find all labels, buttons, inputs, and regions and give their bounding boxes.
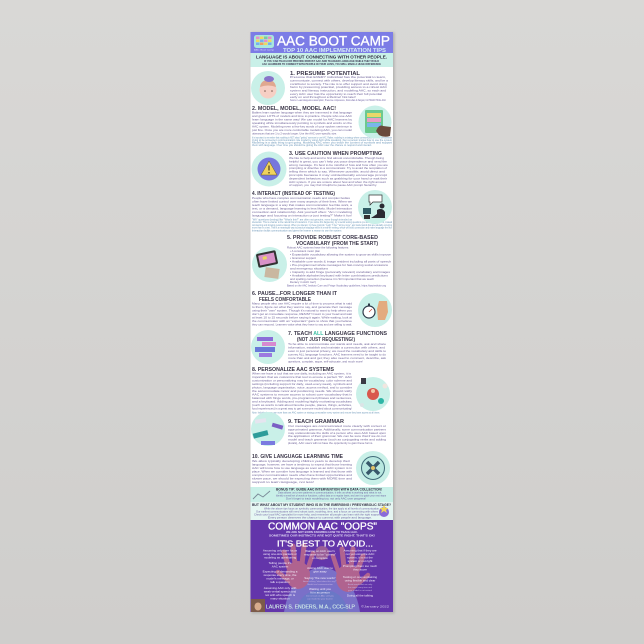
text block: and a keyboard. Adding and modeling highly motivating vocabulary bbox=[252, 400, 352, 404]
notes: more than in a test. This is a meaningful way to practice language skills in a real-life setting, which will build connection and make language feel fun bbox=[252, 227, 393, 230]
text block: Don't forget to track modeling too, not only AAC user progress! bbox=[286, 498, 366, 500]
icon: personalization hub bbox=[356, 377, 390, 411]
panel: tip 2 model bbox=[251, 106, 393, 147]
text block: (such as words to talk about favorite people, places, things, activities, bbox=[252, 403, 352, 407]
text block: AAC systems to ensure access to robust core vocabulary that is bbox=[252, 392, 353, 396]
column: right oops: Avoid words that are only bbox=[348, 583, 373, 586]
text block: Many people who use AAC require a lot of time to process what is said bbox=[252, 302, 352, 306]
text block bbox=[269, 530, 375, 538]
heading: 5. PROVIDE ROBUST CORE-BASED bbox=[287, 235, 378, 241]
text block bbox=[287, 246, 391, 288]
notes: Interaction builds communication and gives the learner a reason to use the system. bbox=[252, 229, 342, 232]
panel: tip 9 grammar bbox=[251, 412, 386, 446]
text block: the communicator with an "expectant" gaze to show that you believe bbox=[252, 319, 352, 323]
subtitle: TOP 10 AAC IMPLEMENTATION TIPS bbox=[283, 48, 386, 54]
intro band: IF YOU CAN TEACH OR PROVIDE ROBUST AAC AND TEACHER LANGUAGE WHILE THEY BUILD bbox=[264, 60, 379, 63]
text block: telling them which to say. Whenever possible, avoid direct and bbox=[289, 170, 385, 174]
text block: Check your local AAC specialist for more help, and remember all people can learn with the right support bbox=[254, 514, 380, 516]
text block: learn language in the same way! We can model for AAC learners by bbox=[252, 118, 352, 122]
title: AAC BOOT CAMP bbox=[277, 34, 390, 48]
text block: photos, language organization, voice, access method, and to consider bbox=[252, 386, 352, 390]
column: left oops bbox=[263, 548, 298, 600]
text block: even in just personal privacy, we need the vocabulary and skills to bbox=[288, 349, 386, 353]
text block: WE ARE NOT BORN KNOWING HOW TO TEACH AAC. bbox=[286, 530, 358, 534]
notes: trying to be someone's communication role model by using AAC while speaking, then a person knows how to use the system bbox=[252, 139, 392, 142]
column: right oops: Prompting them too much bbox=[343, 564, 378, 568]
column: left oops: Assuming AAC only with bbox=[264, 586, 297, 590]
text block: teach language in a way that makes communication feel like work, a bbox=[252, 203, 352, 207]
text block: the application of their grammar. We can be sure that if we do not bbox=[288, 434, 386, 438]
icon: logo: AAC Boot Camp bbox=[254, 48, 275, 52]
notes: commenting and showing genuine interest. When you interact, try these prompts: "Look" "I like" "tell me more", and model words that are naturally occurring bbox=[252, 224, 393, 227]
text block: information, establish and maintain a connection with others, and bbox=[288, 346, 385, 350]
column: right oops: using flexible and clear bbox=[345, 578, 375, 582]
text block bbox=[252, 459, 352, 484]
text block: AAC system. If you are unsure about how and when the right amount bbox=[289, 180, 386, 184]
column: left oops: response every time, the bbox=[264, 573, 297, 577]
text block: language and focusing on interaction or just testing?" Make it fun! bbox=[252, 213, 352, 217]
heading: 10. GIVE LANGUAGE LEARNING TIME bbox=[252, 454, 344, 460]
column: right oops: Assuming that if they are bbox=[343, 548, 377, 552]
text block: often have limited control over many aspects of their lives. When we bbox=[252, 199, 352, 203]
column: middle oops: Saying "the new words" bbox=[304, 576, 336, 580]
column: right oops: the same every time and bbox=[348, 586, 373, 589]
icon: warning triangle bbox=[252, 152, 286, 186]
text block: of support, you may find it helpful to pause AAC prompt hierarchy. bbox=[289, 183, 377, 187]
text block: and spelling correction (because it is SO important that we teach bbox=[290, 277, 374, 281]
text block: and emergency situations bbox=[290, 266, 328, 270]
text block: Source: Least dangerous assumption; Presume competence, Donnellan & Zangari, for PRAACTICAL AAC bbox=[290, 99, 386, 102]
column: middle oops: give away bbox=[313, 570, 327, 574]
text block: Robust AAC systems have the following features: bbox=[287, 246, 349, 250]
text block: model and teach grammar (such as conjugating verbs and adding bbox=[288, 438, 386, 442]
heading: BONUS TIP: GUIDE AAC INTERVENTION WITH DATA COLLECTION! bbox=[276, 488, 382, 492]
text block: early on and throughout a lifetime! Not later! bbox=[290, 95, 356, 99]
text block: settings (including support for daily, used-every-week), symbols and bbox=[252, 382, 352, 386]
text block: Data allows us to see patterns in communication, it tells us what is working and what is not. bbox=[278, 492, 382, 494]
text block: To be able to communicate our wants and needs, ask and share bbox=[288, 342, 386, 346]
text block: system and literacy instruction, and modeling AAC, so each and bbox=[290, 89, 386, 93]
text block: When we have a tool that we use daily, including an AAC system, it is bbox=[252, 372, 351, 376]
heading bbox=[288, 331, 388, 343]
column: left oops: Expecting or demanding a bbox=[263, 570, 298, 574]
text block: to them, figure out what they want to say, and generate their message bbox=[252, 305, 352, 309]
panel: tip 3 caution bbox=[252, 151, 388, 187]
text block: place. When we consider how language is learned and that those with bbox=[252, 470, 352, 474]
text block: complex communication needs often have limited opportunities and bbox=[252, 473, 352, 477]
icon: line graph bbox=[253, 491, 270, 499]
text block: We like to help and tend to find almost uncomfortable. Though being bbox=[289, 156, 384, 160]
text block: convey ALL language functions. AAC learners need to be taught to do bbox=[288, 352, 386, 356]
text block bbox=[251, 110, 353, 136]
column: right oops: they score bbox=[353, 568, 367, 572]
text block: communicate, connect with others, develop literacy skills, and be a bbox=[290, 78, 388, 82]
column: left oops: AAC system bbox=[272, 564, 289, 568]
text block: AAC system. Modeling even a few key words of your spoken sentence is bbox=[252, 124, 352, 128]
text block: helpful is great, you can't help you pace dependence and send the bbox=[289, 159, 387, 163]
column: left oops: Assuming only core focus bbox=[263, 548, 298, 552]
icon: logo bbox=[254, 35, 275, 52]
column: middle oops: response to be "correct" bbox=[304, 552, 336, 556]
text block: Our earliest communicators still need robust tools, modeling, time, and a focus on connecting with others bbox=[256, 510, 379, 514]
column: middle oops: Asking AAC user to bbox=[307, 566, 333, 570]
column: middle oops bbox=[303, 549, 337, 600]
text block: dependent behaviors such as grabbing for your hand or wait their bbox=[289, 176, 387, 180]
heading: 6. PAUSE...FOR LONGER THAN IT bbox=[252, 291, 338, 297]
text block: • Capacity to add fringe (personally relevant) vocabulary and images bbox=[290, 270, 390, 274]
heading: 2. MODEL, MODEL, MODEL AAC! bbox=[252, 106, 336, 112]
text block bbox=[252, 372, 353, 410]
text block: plurals), AAC users will not have the opportunity to gain these forms. bbox=[288, 441, 373, 445]
icon: author portrait bbox=[251, 599, 265, 612]
text block: language, however, we have a tendency to expect that those learning bbox=[252, 462, 352, 466]
text block bbox=[290, 75, 388, 102]
notes bbox=[252, 218, 393, 232]
text block: AAC will know how to use language as soon as an AAC system is in bbox=[252, 466, 352, 470]
text block: Every person deserves the chance to connect with people and language. bbox=[268, 516, 373, 520]
column: middle oops: Model real communication bbox=[307, 583, 334, 586]
text block bbox=[288, 342, 386, 364]
panel: tip 10 language learning time bbox=[252, 451, 390, 485]
icon: tablet and hand bbox=[358, 106, 392, 138]
heading bbox=[252, 291, 338, 303]
heading: FEELS COMFORTABLE bbox=[259, 297, 311, 303]
text block: slower pace, we should be expecting them with MORE time and bbox=[252, 476, 352, 480]
text block: • Grammar support bbox=[290, 256, 316, 260]
text block: don't get an immediate response, RESIST! Count to your head and wait bbox=[252, 312, 352, 316]
text block: using their "own" system. Though it's natural to want to help when you bbox=[252, 308, 352, 312]
text block: Babies learn spoken language when they are immersed in that language bbox=[252, 110, 352, 114]
text block: literacy in AAC too!) bbox=[290, 280, 316, 284]
text block: more than ask and get; they also need to comment, describe, ask bbox=[288, 356, 386, 360]
panel: tip 4 interact bbox=[252, 190, 393, 232]
text block: support to learn language, not less! bbox=[252, 480, 314, 484]
text block: contributor to society. The role is to offer support and avoid doing bbox=[290, 82, 387, 86]
text block: While the above tips focus on symbolic communication, the tips apply at all levels of communication bbox=[264, 508, 380, 510]
text block bbox=[252, 302, 352, 326]
text block: wrong message. It's best to be mindful of how and how often you are bbox=[289, 163, 388, 167]
copyright: ©January 2022 bbox=[361, 606, 390, 608]
column: left oops: weak verbal speech and bbox=[264, 590, 297, 594]
illustration: hands and figure bbox=[278, 546, 368, 612]
column: middle oops: can model for your learner bbox=[307, 598, 333, 600]
column: left oops: not with who speech is bbox=[265, 593, 296, 597]
text block: People who have complex communication needs and complex bodies bbox=[252, 196, 350, 200]
text block: balanced with fringe words, pre-programmed phrases and sentences, bbox=[252, 396, 352, 400]
text block: prompts because it may unintentionally encourage prompt bbox=[289, 173, 387, 177]
notes: Modeling is a daily thing to get going. Modeling AAC when you teach the content of symbols and support bbox=[252, 142, 392, 144]
column: middle oops: or complete bbox=[312, 556, 328, 560]
text block: Presume that EVERY individual has the potential to learn, bbox=[290, 75, 386, 79]
notes bbox=[252, 136, 393, 147]
column: left oops: modeling as questioning bbox=[264, 556, 297, 560]
column: left oops: Telling people it's bbox=[269, 561, 292, 565]
text block: Based on the AAC Institute Core and Fringe Vocabulary guidelines, https://aacinstitute.org bbox=[287, 284, 387, 288]
heading: 8. PERSONALIZE AAC SYSTEMS bbox=[252, 367, 335, 373]
column: left oops: talk a question bbox=[270, 580, 290, 584]
column: left oops: using one-size packets or bbox=[263, 552, 297, 556]
text block: important that we customize that tool to ensure a perfect "fit". AAC bbox=[252, 375, 353, 379]
text block: just fine. Once you are more comfortable modeling AAC, you can model bbox=[251, 128, 352, 132]
notes: "Wh" questions (testing) like "What's this?" are often not genuine, even though intended as bbox=[252, 218, 353, 222]
text block: customization or personalizing may be vocabulary, color scheme and bbox=[252, 378, 352, 382]
text block: food experiences) is a great way to get someone excited about communicating! bbox=[252, 406, 352, 410]
column: right oops bbox=[343, 548, 378, 598]
icon: stopwatch and hand bbox=[358, 293, 392, 327]
author name: LAUREN S. ENDERS, M.A., CCC-SLP bbox=[266, 604, 355, 610]
icon: head with brain bbox=[251, 71, 285, 105]
icon: AAC devices bbox=[252, 247, 287, 282]
column: right oops: system, it is not the bbox=[347, 556, 373, 560]
footer bbox=[251, 599, 390, 612]
column: right oops: system or not right bbox=[348, 559, 372, 563]
icon: word cloud bbox=[251, 330, 285, 364]
column: right oops: Doing all the talking bbox=[347, 594, 373, 598]
text block: utterances that are 1 to 2 words longer. Use the AAC user-specific size. bbox=[252, 132, 337, 136]
text block: at least 10 to 15 seconds before saying it again. While waiting, look at bbox=[252, 316, 352, 320]
notes: interaction. This is a barrier to the natural flow of interaction. If you notice this happening, try to avoid testing questions you know the answer to, instead bbox=[252, 221, 393, 224]
heading: best to avoid: IT'S BEST TO AVOID... bbox=[277, 540, 373, 548]
column: middle oops: Waiting until you bbox=[309, 587, 331, 591]
heading: 7. TEACH ALL LANGUAGE FUNCTIONS bbox=[288, 331, 388, 337]
text block: Identify a small set of words or functions, collect data on a regular basis, and use it to guide your next steps bbox=[276, 494, 387, 498]
text block: test, or a demand, language learning is less likely. Model interaction bbox=[252, 206, 352, 210]
notes: them with language. Over time you should be giving the AAC user the chance to respond and interact. bbox=[252, 144, 372, 147]
header banner bbox=[250, 32, 393, 54]
notes: Note: Individuals may use more than one AAC system or strategy, personalize every system and ensure they have access at all times. bbox=[252, 412, 380, 414]
panel: tip 5 robust vocabulary bbox=[252, 235, 391, 288]
icon: word tiles bbox=[251, 412, 285, 446]
panel: tip 8 personalize bbox=[252, 367, 390, 414]
text block: • Available core words & image resident including all parts of speech bbox=[290, 260, 391, 264]
column: middle oops: Waiting on AAC user's bbox=[305, 549, 335, 553]
intro band: AAC LEARNERS TO CONNECT WITH PEOPLE IN YOUR LIVES, YOU WILL MAKE A HUGE DIFFERENCE bbox=[262, 63, 381, 66]
bonus tip band bbox=[250, 487, 393, 502]
heading: 4. INTERACT (INSTEAD OF TESTING) bbox=[252, 191, 335, 197]
panel: tip 6 pause bbox=[252, 291, 392, 327]
text block: may underestimate the skills of a person who uses AAC based upon bbox=[288, 431, 386, 435]
text block: connection and relationship. Ask yourself often: "Am I modeling bbox=[252, 210, 352, 214]
heading: 9. TEACH GRAMMAR bbox=[288, 419, 344, 425]
text block: approximated grammar. Additionally, some communication partners bbox=[288, 427, 386, 431]
heading: 3. USE CAUTION WHEN PROMPTING bbox=[289, 151, 382, 157]
text block: • Available alphabet keyboard with letter combinations predictions bbox=[290, 274, 388, 278]
column: left oops: many situation bbox=[270, 596, 290, 600]
icon: people interacting bbox=[358, 190, 392, 224]
panel: common AAC oops bbox=[250, 520, 393, 612]
heading: (NOT JUST REQUESTING!) bbox=[297, 337, 355, 343]
text block: SOMETIMES OUR INSTINCTS ARE NOT QUITE RIGHT. THAT'S OK! bbox=[269, 534, 375, 538]
text block: We allow typically developing children years to develop their bbox=[252, 459, 350, 463]
text block bbox=[276, 492, 387, 500]
text block: speaking while simultaneously pointing to symbols and words on the bbox=[252, 121, 352, 125]
text block: prompting or directive to a communicator. Try to avoid the temptation of bbox=[289, 166, 387, 170]
panel: tip 7 all language functions bbox=[251, 330, 388, 364]
emerging communicator band bbox=[250, 502, 393, 520]
text block: Our messages are communicated more clearly with correct or bbox=[288, 424, 386, 428]
heading: 1. PRESUME POTENTIAL bbox=[290, 71, 361, 77]
text block: questions, complain, argue, self-advocate, and much more! bbox=[288, 360, 363, 364]
panel: tip 1 presume potential bbox=[251, 71, 388, 105]
heading: BUT WHAT ABOUT MY STUDENT WHO IS IN THE EMERGING / PRESYMBOLIC STAGE? bbox=[252, 503, 391, 507]
icon: purple star bbox=[379, 505, 389, 517]
column: right oops: not yet using the AAC bbox=[346, 552, 375, 556]
intro band: LANGUAGE IS ABOUT CONNECTING WITH OTHER PEOPLE. bbox=[256, 54, 387, 60]
text block bbox=[289, 156, 388, 187]
text block: the accommodate motor and positioning needs. We should notify bbox=[252, 389, 353, 393]
text block: • Pre-programmed whole messages for fast-moving social occasions bbox=[290, 263, 388, 267]
column: middle oops: fit in as person bbox=[310, 590, 330, 594]
column: middle oops: Avoid asking "what does this say?" bbox=[303, 580, 337, 583]
text block bbox=[288, 424, 386, 445]
text block bbox=[252, 196, 352, 217]
notes: It is important to remember that modeling is NOT about "getting" someone to use AAC. Rather, modeling is a strategy where communication partners demonstrate bbox=[252, 136, 393, 140]
heading: VOCABULARY (FROM THE START) bbox=[296, 241, 378, 247]
text block: • A consistent motor plan bbox=[290, 249, 320, 253]
heading: COMMON AAC "OOPS" bbox=[268, 522, 377, 532]
text block: • Expandable vocabulary allowing the system to grow as skills improve bbox=[290, 252, 391, 256]
text block: and given LOTS of models and time to practice. People who use AAC bbox=[252, 114, 353, 118]
column: middle oops: Do not wait on AAC until you bbox=[306, 594, 335, 598]
column: right oops: Testing or over-explaining bbox=[343, 575, 377, 579]
text block bbox=[254, 508, 380, 520]
intro band bbox=[250, 53, 393, 67]
column: right oops: your model is not natural bbox=[348, 589, 372, 592]
text block: harm by presuming potential, providing access to a robust AAC bbox=[290, 85, 388, 89]
text block: they can respond. Learners value what they have to say and are willing to wait. bbox=[252, 322, 352, 326]
column: left oops: model's message, or bbox=[266, 576, 294, 580]
heading bbox=[287, 235, 378, 247]
poster bbox=[250, 32, 393, 612]
icon: hourglass bbox=[356, 451, 390, 485]
text block: every AAC user has the opportunity to reach their full potential bbox=[290, 92, 382, 96]
